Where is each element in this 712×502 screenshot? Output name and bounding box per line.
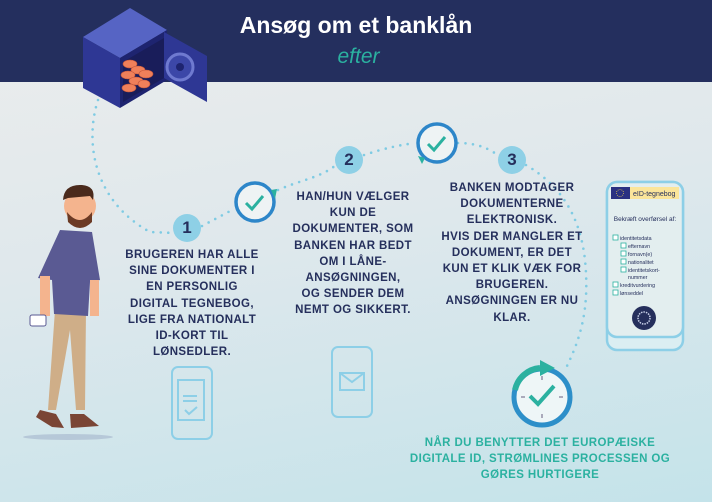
- step 1 text: BRUGEREN HAR ALLE: [125, 249, 259, 261]
- step 3 text: BRUGEREN.: [476, 279, 548, 291]
- eID phone: [607, 182, 683, 350]
- step 1 text: ID-KORT TIL: [156, 330, 228, 342]
- eID phone: fornavn(e): [628, 252, 652, 258]
- dotted path: [92, 100, 586, 370]
- conclusion text: [410, 435, 670, 481]
- step 3 text: ANSØGNINGEN ER NU: [446, 295, 578, 307]
- icon: safe: [83, 8, 207, 108]
- eID phone: identitetsdata: [620, 236, 652, 242]
- step 2 text: BANKEN HAR BEDT: [294, 240, 412, 252]
- step 2 text: OM I LÅNE-: [319, 256, 387, 268]
- eID phone: identitetskort-: [628, 268, 660, 274]
- step 3 text: ELEKTRONISK.: [467, 214, 557, 226]
- step 2 text: DOKUMENTER, SOM: [292, 223, 414, 235]
- step 2 text: [292, 191, 414, 316]
- step 2 number: [335, 146, 363, 174]
- eID phone: lønseddel: [620, 291, 643, 297]
- conclusion text: DIGITALE ID, STRØMLINES PROCESSEN OG: [410, 453, 670, 465]
- step 2 text: NEMT OG SIKKERT.: [295, 304, 411, 316]
- conclusion text: NÅR DU BENYTTER DET EUROPÆISKE: [425, 437, 655, 449]
- icon: clock 1: [236, 183, 277, 221]
- header band: [0, 0, 712, 82]
- step 1 text: LØNSEDLER.: [153, 346, 231, 358]
- eID phone: efternavn: [628, 244, 650, 250]
- step 1 text: DIGITAL TEGNEBOG,: [130, 298, 254, 310]
- icon: phone 1: [172, 367, 212, 439]
- step 3 text: KLAR.: [493, 312, 531, 324]
- step 3 text: DOKUMENT, ER DET: [452, 247, 572, 259]
- step 3 text: BANKEN MODTAGER: [450, 182, 574, 194]
- step 2 text: ANSØGNINGEN,: [306, 272, 400, 284]
- title: Ansøg om et banklån: [240, 12, 472, 38]
- step 2 text: KUN DE: [330, 207, 376, 219]
- step 3 text: HVIS DER MANGLER ET: [441, 231, 583, 243]
- step 1 number: [173, 214, 201, 242]
- step 2 text: HAN/HUN VÆLGER: [297, 191, 409, 203]
- person: [23, 185, 113, 440]
- step 1 text: [125, 249, 259, 358]
- icon: phone 2: [332, 347, 372, 417]
- step 2 text: OG SENDER DEM: [302, 288, 404, 300]
- eID phone: nummer: [628, 275, 648, 281]
- eID phone: kreditvurdering: [620, 283, 655, 289]
- step 1 text: LIGE FRA NATIONALT: [128, 314, 256, 326]
- step 3 text: KUN ET KLIK VÆK FOR: [443, 263, 581, 275]
- step 2 number: 2: [344, 150, 354, 169]
- eID phone: nationalitet: [628, 260, 654, 266]
- step 3 number: [498, 146, 526, 174]
- conclusion text: GØRES HURTIGERE: [481, 469, 599, 481]
- subtitle: efter: [337, 45, 380, 68]
- step 3 number: 3: [507, 150, 517, 169]
- eID phone: Bekræft overførsel af:: [614, 216, 676, 223]
- step 3 text: [441, 182, 583, 324]
- icon: clock 2: [418, 124, 456, 164]
- step 3 text: DOKUMENTERNE: [460, 198, 564, 210]
- step 1 number: 1: [182, 218, 192, 237]
- step 1 text: EN PERSONLIG: [146, 281, 238, 293]
- step 1 text: SINE DOKUMENTER I: [129, 265, 255, 277]
- icon: clock 3: [514, 360, 570, 425]
- eID phone: eID-tegnebog: [633, 191, 676, 198]
